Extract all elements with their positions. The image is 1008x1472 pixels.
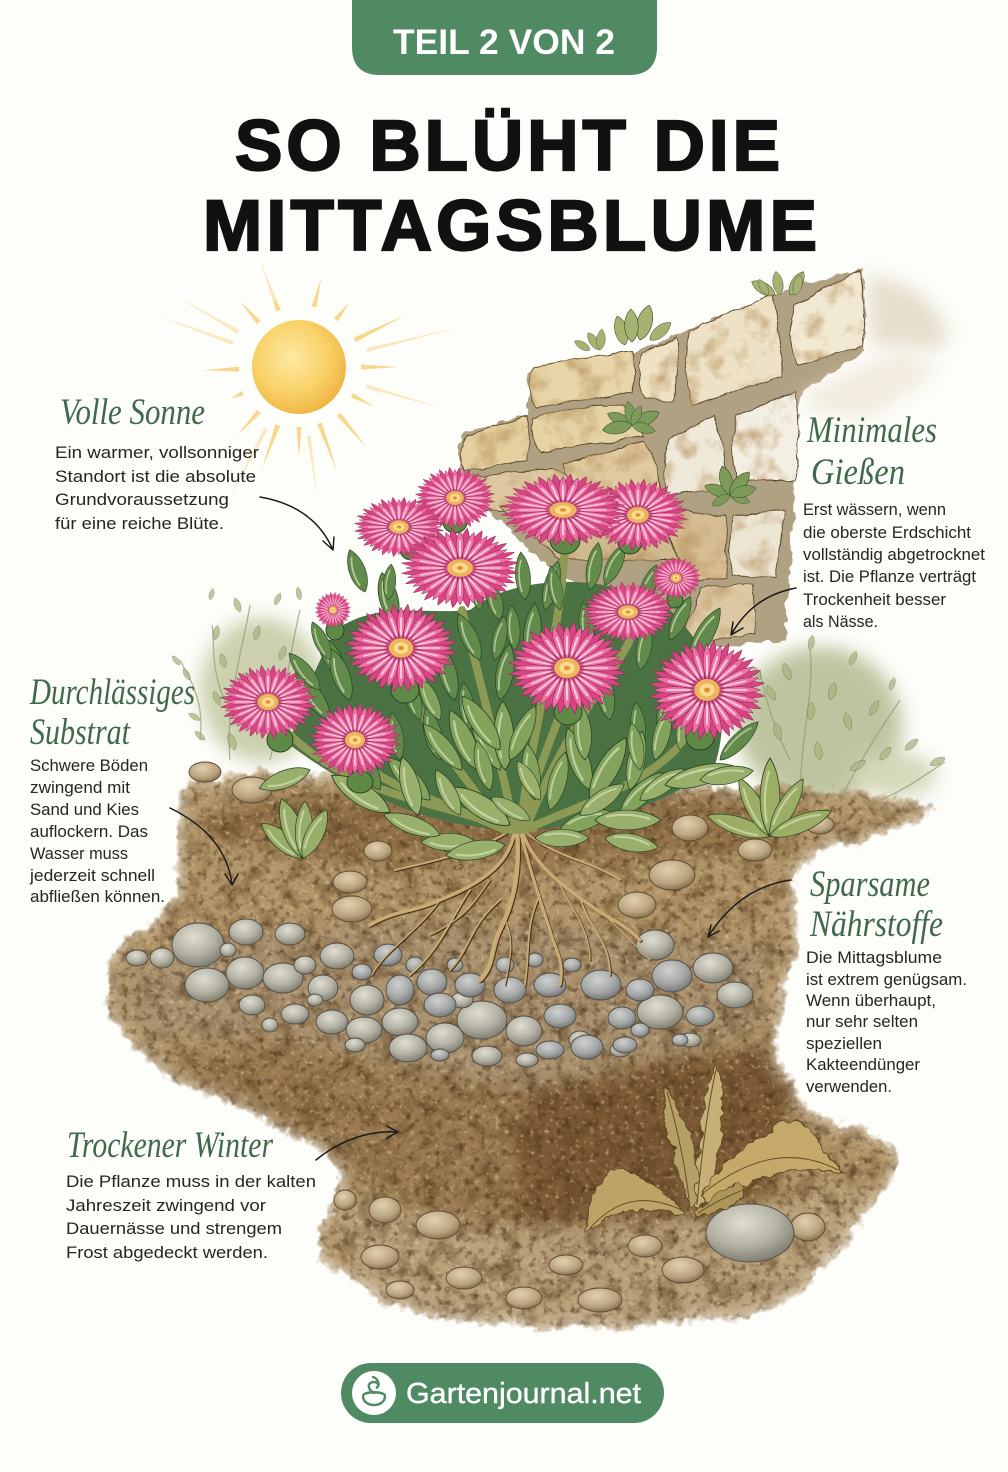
text block: Durchlässiges Substrat: abfließen können. [30, 887, 165, 906]
text block: Durchlässiges Substrat [29, 672, 195, 906]
text block: Volle Sonne: Standort ist die absolute [55, 467, 256, 486]
text block: Durchlässiges Substrat: Wasser muss [30, 844, 128, 863]
middle leaves [381, 673, 696, 838]
upper leaves [283, 541, 763, 794]
header tab [352, 0, 657, 75]
text block: Sparsame Nährstoffe [806, 864, 967, 1096]
text block: Sparsame Nährstoffe: Wenn überhaupt, [806, 991, 936, 1010]
text block: Minimales Gießen: Minimales [806, 410, 937, 451]
text block: Minimales Gießen: als Nässe. [803, 612, 878, 631]
text block: Trockener Winter: Trockener Winter [67, 1125, 273, 1166]
text block: Trockener Winter: Dauernässe und strengem [66, 1219, 282, 1238]
illustration: small seedling right [705, 758, 834, 844]
illustration: Mittagsblume plant [202, 458, 787, 865]
flowers [202, 458, 787, 788]
text block: Minimales Gießen: Trockenheit besser [803, 590, 946, 609]
text block: Minimales Gießen [803, 410, 985, 631]
lower leaves [256, 755, 755, 865]
text block: Trockener Winter: Die Pflanze muss in der kalten [66, 1172, 316, 1191]
text block: Volle Sonne: Volle Sonne [60, 392, 205, 433]
text block: Sparsame Nährstoffe: verwenden. [806, 1077, 892, 1096]
illustration: gravel layer [126, 919, 753, 1067]
illustration: stone wall [460, 268, 950, 650]
text block: Sparsame Nährstoffe: Sparsame [810, 864, 930, 905]
text block: Durchlässiges Substrat: zwingend mit [30, 778, 130, 797]
icon: logo plant in pot [352, 1371, 396, 1415]
text block: Trockener Winter: Jahreszeit zwingend vor [66, 1196, 266, 1215]
foliage mass [290, 582, 722, 830]
text block: Volle Sonne: Ein warmer, vollsonniger [55, 443, 259, 462]
footer badge: Gartenjournal.net [406, 1378, 641, 1410]
text block: Durchlässiges Substrat: Durchlässiges [29, 672, 195, 713]
text block: Durchlässiges Substrat: Schwere Böden [30, 756, 148, 775]
text block: Sparsame Nährstoffe: Nährstoffe [809, 904, 943, 945]
text block: Sparsame Nährstoffe: Kakteendünger [806, 1055, 920, 1074]
illustration: roots [370, 830, 650, 985]
illustration: wall tufts [573, 269, 808, 509]
text block: Sparsame Nährstoffe: nur sehr selten [806, 1012, 918, 1031]
title [203, 107, 817, 266]
stems [290, 545, 705, 830]
text block: Sparsame Nährstoffe: Die Mittagsblume [806, 948, 942, 967]
flower calyxes [267, 511, 714, 793]
illustration: soil cross-section [103, 770, 950, 1330]
text block: Durchlässiges Substrat: Sand und Kies [30, 800, 139, 819]
illustration: sun [157, 258, 460, 500]
text block: Volle Sonne: für eine reiche Blüte. [55, 514, 224, 533]
title: MITTAGSBLUME [203, 187, 817, 266]
illustration: soil stones [189, 762, 834, 1312]
title: SO BLÜHT DIE [235, 107, 780, 186]
text block: Volle Sonne [55, 392, 259, 533]
text block: Minimales Gießen: vollständig abgetrocknet [803, 545, 985, 564]
text block: Trockener Winter [66, 1125, 316, 1262]
header tab: TEIL 2 VON 2 [393, 23, 615, 62]
text block: Durchlässiges Substrat: auflockern. Das [30, 822, 148, 841]
footer badge [341, 1363, 664, 1423]
text block: Minimales Gießen: Gießen [811, 452, 905, 493]
text block: Minimales Gießen: Erst wässern, wenn [803, 500, 946, 519]
text block: Trockener Winter: Frost abgedeckt werden. [66, 1243, 268, 1262]
text block: Sparsame Nährstoffe: speziellen [806, 1034, 882, 1053]
illustration: background bushes [170, 587, 947, 803]
text block: Durchlässiges Substrat: Substrat [30, 712, 131, 753]
text block: Minimales Gießen: ist. Die Pflanze verträgt [803, 567, 976, 586]
illustration: dried winter plant [586, 1062, 843, 1233]
text block: Sparsame Nährstoffe: ist extrem genügsam. [806, 970, 967, 989]
arrows [170, 497, 796, 1160]
text block: Volle Sonne: Grundvoraussetzung [55, 490, 229, 509]
text block: Minimales Gießen: die oberste Erdschicht [803, 523, 971, 542]
text block: Durchlässiges Substrat: jederzeit schnell [29, 866, 155, 885]
illustration: large rock [706, 1204, 794, 1262]
illustration: small seedling left [256, 795, 334, 865]
